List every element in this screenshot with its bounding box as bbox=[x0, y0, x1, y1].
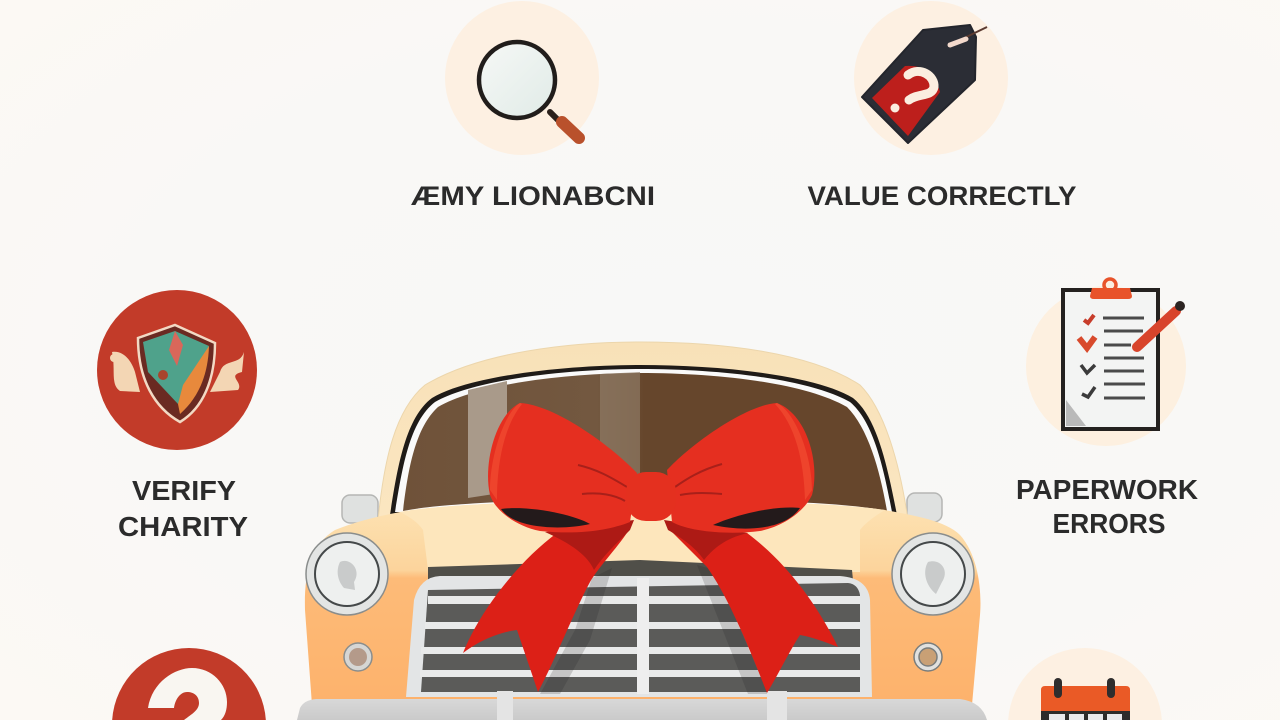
car: grille bbox=[406, 560, 872, 697]
label: garbled heading: ÆMY LIONABCNI bbox=[411, 181, 655, 211]
icon: calendar bbox=[1008, 648, 1162, 720]
icon: question mark badge bbox=[112, 648, 266, 720]
bow: loop openings bbox=[501, 507, 800, 529]
bow: tail shading bbox=[545, 520, 748, 570]
label: value correctly: VALUE CORRECTLY bbox=[808, 181, 1076, 211]
car: windshield bbox=[390, 365, 897, 515]
illustration: vintage car with red bow bbox=[297, 342, 987, 720]
icon: shield badge bbox=[97, 290, 257, 450]
label: paperwork errors: ERRORS bbox=[1052, 508, 1166, 539]
car: headlights bbox=[306, 533, 974, 615]
bow: folds bbox=[578, 464, 722, 501]
car: body bbox=[305, 500, 980, 705]
bow: right loop bbox=[667, 403, 814, 533]
label: verify charity bbox=[118, 475, 248, 542]
car: hood bbox=[400, 500, 885, 572]
car: roof bbox=[378, 342, 908, 520]
car: bumper bbox=[297, 691, 987, 720]
label: verify charity: VERIFY bbox=[132, 475, 236, 506]
bow: highlights bbox=[490, 403, 812, 500]
bow: left loop bbox=[488, 403, 637, 532]
bow: right tail bbox=[668, 528, 838, 693]
label: paperwork errors: PAPERWORK bbox=[1016, 474, 1198, 505]
icon: price tag with question mark bbox=[854, 1, 1008, 155]
icon: clipboard checklist bbox=[1026, 279, 1186, 446]
bow: knot bbox=[626, 472, 676, 521]
label: verify charity: CHARITY bbox=[118, 511, 248, 542]
car: side mirrors bbox=[342, 493, 942, 523]
label: paperwork errors bbox=[1016, 474, 1198, 539]
icon: magnifying glass bbox=[445, 1, 599, 155]
car: fog lights bbox=[344, 643, 942, 671]
bow: left tail bbox=[463, 528, 630, 692]
